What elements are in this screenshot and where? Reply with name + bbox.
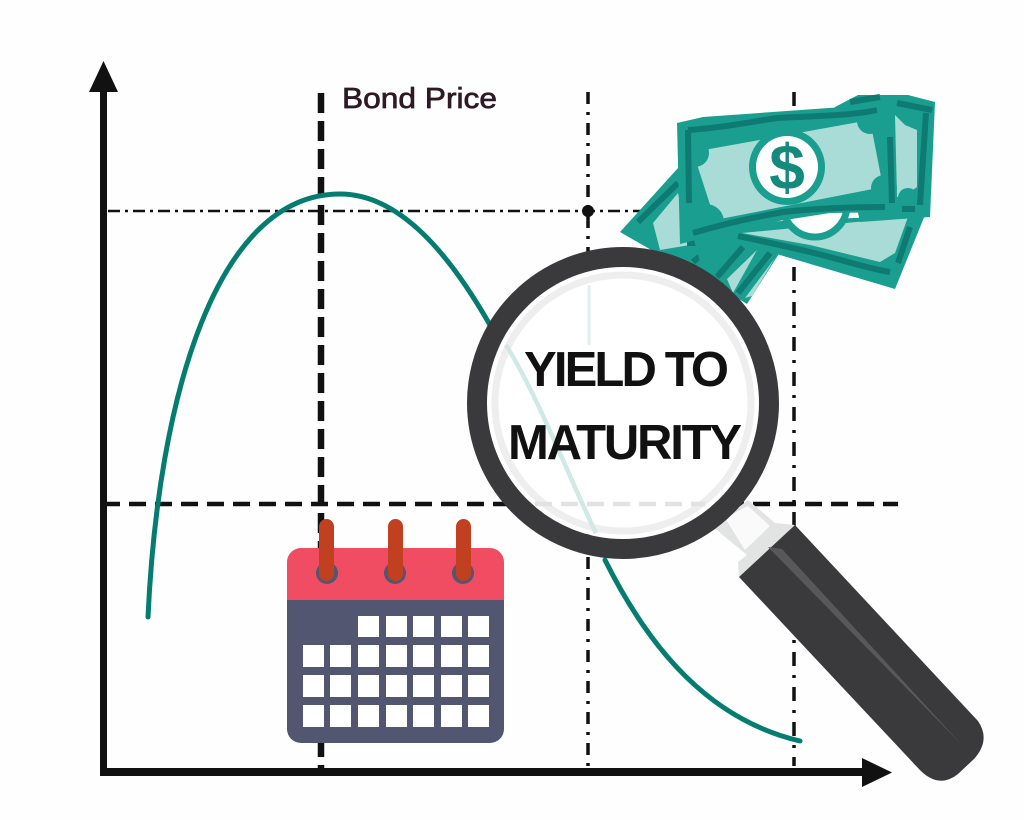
title: yield to maturity	[508, 343, 742, 470]
title: yield to maturity: MATURITY	[508, 416, 742, 470]
heading: bond price: Bond Price	[342, 83, 497, 115]
lens	[477, 257, 769, 549]
x axis arrow	[100, 758, 892, 787]
y axis arrow	[89, 61, 118, 772]
icon: dollar bills	[620, 95, 935, 304]
title: yield to maturity: YIELD TO	[524, 343, 729, 397]
axes	[89, 61, 892, 787]
guide lines	[103, 92, 898, 768]
left bill	[620, 168, 780, 304]
handle collar	[713, 500, 795, 577]
handle	[739, 525, 984, 781]
back bill	[835, 95, 935, 222]
front bill	[677, 104, 897, 244]
lower bill	[690, 173, 925, 289]
dollar coin: $	[769, 131, 805, 203]
price curve	[148, 194, 800, 741]
magnifying glass	[477, 257, 984, 781]
dollar coin	[749, 129, 825, 205]
icon: calendar	[287, 519, 504, 743]
